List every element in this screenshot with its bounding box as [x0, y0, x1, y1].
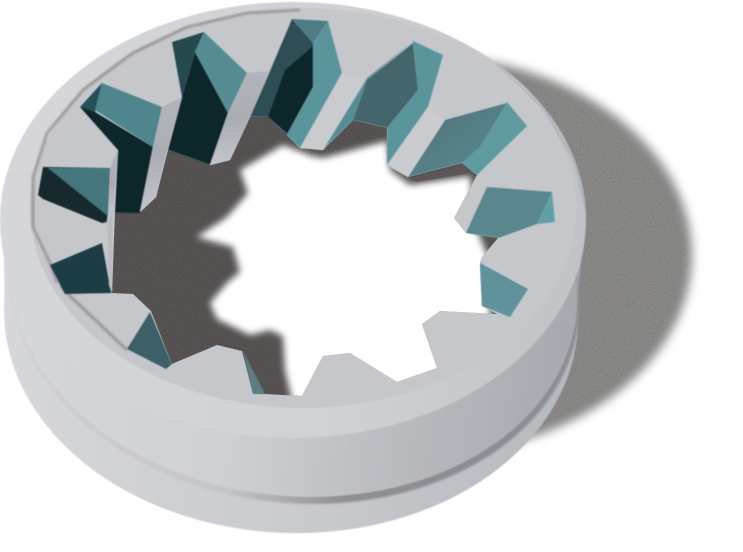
- left gap wall dark: [38, 167, 110, 223]
- second gap lit face: [95, 83, 162, 147]
- eighth gap face: [480, 263, 528, 317]
- front wall band: [0, 45, 598, 525]
- fifth gap left sliver: [323, 41, 413, 150]
- lowest left gap wall: [50, 243, 112, 294]
- top plane of teeth: [30, 8, 576, 408]
- seventh gap center face: [466, 187, 552, 238]
- fifth gap lit face: [387, 41, 443, 165]
- floor shadow sliver by right tooth: [410, 165, 471, 182]
- fourth gap lit face: [287, 21, 342, 148]
- sixth gap lit face: [462, 102, 527, 175]
- bottom gap wall: [243, 351, 265, 394]
- third gap dark face: [168, 52, 228, 165]
- third gap corner: [172, 32, 204, 97]
- lower left gap wall: [127, 312, 172, 369]
- seventh gap lit face: [537, 192, 555, 224]
- inner rim shadow at lower left: [60, 285, 127, 350]
- fourth gap top face: [292, 19, 328, 43]
- fourth gap dark face: [268, 46, 313, 133]
- third gap lit face: [195, 32, 247, 113]
- fifth gap center face: [353, 43, 418, 128]
- upper chamfer band: [0, 2, 586, 438]
- rim groove line: [33, 10, 300, 283]
- lower flange: [0, 87, 585, 543]
- gear opening floor: [112, 117, 498, 396]
- gear walls: [38, 19, 555, 394]
- second gap dark face: [80, 107, 153, 213]
- side wall joining top and flange: [3, 150, 585, 350]
- tooth tip strips: [108, 150, 118, 217]
- groove band: [0, 52, 600, 532]
- left gap wall lit: [48, 168, 110, 216]
- upper right outer edge: [497, 65, 585, 205]
- sixth gap center face: [408, 103, 507, 177]
- cast shadow: [484, 54, 699, 447]
- second gap corner: [80, 83, 102, 113]
- fourth gap left wall: [250, 19, 313, 135]
